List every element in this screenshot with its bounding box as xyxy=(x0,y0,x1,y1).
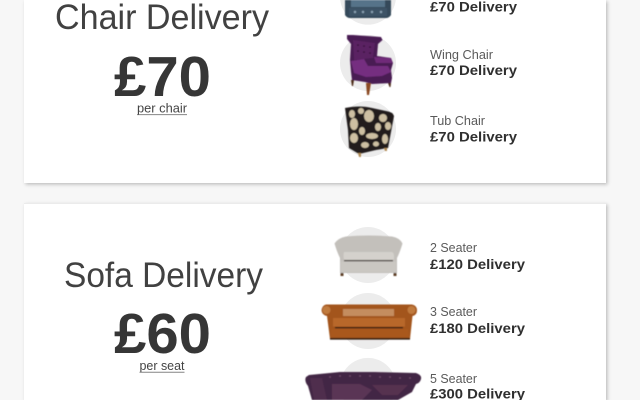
item: wing chair: Wing Chair xyxy=(430,47,494,62)
price: £70 per chair: per chair xyxy=(137,100,188,116)
price: £70 per chair: £70 xyxy=(114,45,211,109)
item: 2 seater sofa: 2 Seater xyxy=(430,240,478,255)
item: 3 seater sofa: £180 Delivery xyxy=(430,320,525,336)
item: 5 seater sofa: 5 Seater xyxy=(430,371,478,386)
item: 5 seater sofa xyxy=(305,358,525,400)
item: tub chair: £70 Delivery xyxy=(430,128,517,144)
heading: sofa delivery: Sofa Delivery xyxy=(64,256,263,295)
panel: chair delivery xyxy=(24,0,606,183)
item: 2 seater sofa xyxy=(334,227,525,283)
price: £60 per seat: per seat xyxy=(140,358,185,373)
price: £60 per seat: £60 xyxy=(114,302,211,366)
item: 3 seater sofa xyxy=(322,293,525,349)
item: 2 seater sofa: £120 Delivery xyxy=(430,256,525,272)
item: wing chair xyxy=(340,35,517,95)
item: wing chair: £70 Delivery xyxy=(430,62,517,78)
item: top chair xyxy=(340,0,517,25)
item: 3 seater sofa: 3 Seater xyxy=(430,304,478,319)
item: tub chair xyxy=(340,101,517,157)
panel: sofa delivery xyxy=(24,203,606,400)
item: tub chair: Tub Chair xyxy=(430,113,486,128)
